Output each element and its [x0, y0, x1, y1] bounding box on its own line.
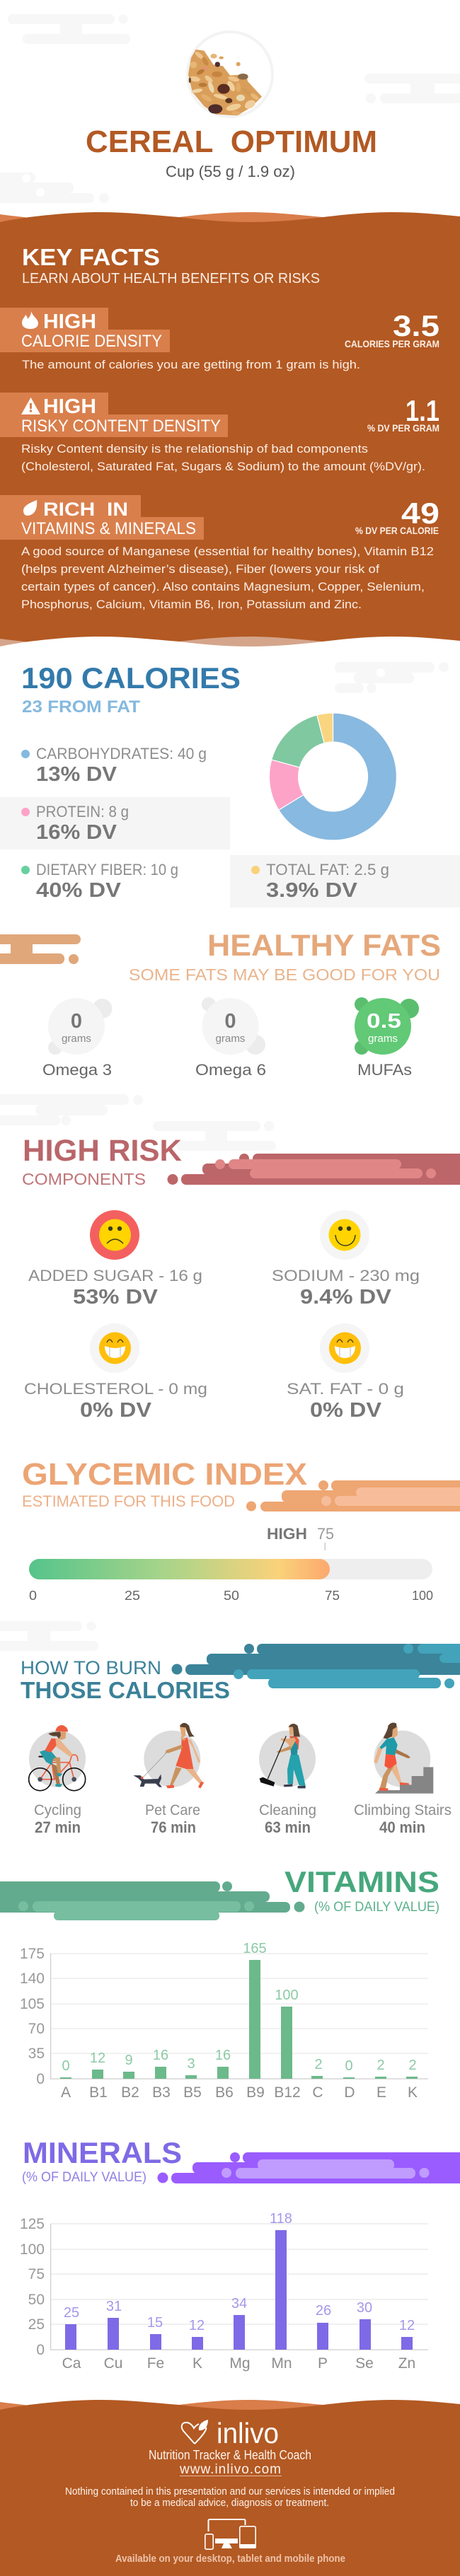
- stat: omega 3: 0: [71, 1010, 82, 1033]
- heading: VITAMINS: [284, 1865, 439, 1898]
- label: high: HIGH: [43, 395, 96, 418]
- subheading: ESTIMATED FOR THIS FOOD: [22, 1492, 235, 1510]
- legend: carbohydrates: 13% DV: [36, 763, 117, 786]
- decorative banner: vitamins: [0, 1881, 304, 1920]
- icon: devices: [205, 2519, 256, 2549]
- bar chart: vitamins: D: [344, 2084, 355, 2101]
- heading: HIGH RISK: [23, 1134, 182, 1168]
- legend: dietary fiber: DIETARY FIBER: 10 g: [36, 861, 178, 878]
- decorative banner: healthy fats: [0, 934, 81, 964]
- item: cholesterol: CHOLESTEROL - 0 mg: [24, 1380, 207, 1398]
- bar chart: minerals: 118: [270, 2211, 292, 2227]
- bar chart: minerals: 50: [28, 2292, 45, 2308]
- description: Phosphorus, Calcium, Vitamin B6, Iron, Potassium and Zinc.: [21, 598, 362, 611]
- bar chart: vitamins: 100: [275, 1988, 299, 2003]
- fact: risky content density: [0, 393, 439, 473]
- heading: calories: 190 CALORIES: [21, 661, 241, 695]
- bar chart: vitamins: 16: [153, 2048, 168, 2063]
- value: 3.5: 3.5: [393, 309, 439, 342]
- gauge scale: [29, 1589, 433, 1603]
- legend: carbohydrates: CARBOHYDRATES: 40 g: [36, 745, 207, 762]
- tagline: Nutrition Tracker & Health Coach: [149, 2448, 311, 2462]
- bar chart: minerals: Ca: [62, 2355, 81, 2372]
- bar chart: vitamins: B6: [215, 2084, 234, 2101]
- item: saturated fat: [287, 1323, 404, 1422]
- bar chart: vitamins: 175: [20, 1946, 45, 1962]
- bar chart: vitamins: 2: [314, 2057, 323, 2072]
- bar chart: vitamins: E: [376, 2084, 386, 2101]
- activity: climbing stairs: [354, 1723, 452, 1836]
- bar chart: vitamins: K: [408, 2084, 418, 2101]
- stat: omega 6: grams: [215, 1033, 245, 1045]
- bar chart: vitamins: B2: [121, 2084, 139, 2101]
- legend: total fat: [230, 855, 460, 907]
- description: certain types of cancer). Also contains Magnesium, Copper, Selenium,: [21, 580, 425, 593]
- unit: CALORIES PER GRAM: [345, 338, 439, 349]
- bar chart: minerals: 25: [64, 2305, 79, 2321]
- panel: high risk components: [0, 1094, 460, 1422]
- bar chart: minerals: Cu: [104, 2355, 122, 2372]
- item: saturated fat: SAT. FAT - 0 g: [287, 1380, 404, 1398]
- item: added sugar: ADDED SUGAR - 16 g: [28, 1267, 202, 1284]
- subheading: (% OF DAILY VALUE): [314, 1900, 439, 1915]
- panel: healthy fats: [0, 929, 441, 1079]
- description: (Cholesterol, Saturated Fat, Sugars & Sodium) to the amount (%DV/gr).: [21, 460, 425, 473]
- activity: climbing stairs: 40 min: [379, 1818, 425, 1836]
- item: added sugar: 53% DV: [73, 1286, 159, 1309]
- item: sodium: SODIUM - 230 mg: [272, 1267, 420, 1284]
- activity: climbing stairs: Climbing Stairs: [354, 1802, 452, 1818]
- bar chart: minerals: P: [318, 2355, 328, 2372]
- description: A good source of Manganese (essential for healthy bones), Vitamin B12: [21, 545, 434, 558]
- stat: omega 6: [195, 997, 266, 1079]
- bar chart: minerals: Zn: [398, 2355, 415, 2372]
- activity: cycling: 27 min: [35, 1818, 81, 1836]
- marker: high 75: 75: [317, 1525, 334, 1543]
- item: added sugar: [28, 1210, 202, 1309]
- gauge scale: 50: [224, 1589, 239, 1603]
- bar chart: vitamins: B12: [274, 2084, 301, 2101]
- heading line 2: THOSE CALORIES: [21, 1677, 230, 1703]
- bar chart: minerals: Se: [355, 2355, 374, 2372]
- bar chart: vitamins: A: [61, 2084, 71, 2101]
- bar chart: minerals: 100: [20, 2241, 45, 2258]
- bar chart: vitamins: 0: [62, 2058, 70, 2074]
- label: risky content density: RISKY CONTENT DENSITY: [21, 417, 221, 436]
- gauge scale: 0: [29, 1589, 37, 1603]
- availability note: Available on your desktop, tablet and mobile phone: [115, 2553, 345, 2565]
- bar chart: vitamins: 16: [215, 2048, 231, 2063]
- subheading: from fat: 23 FROM FAT: [22, 697, 140, 716]
- panel: how to burn those calories: [0, 1621, 460, 1836]
- bar chart: minerals: 25: [28, 2316, 45, 2333]
- activity: cycling: Cycling: [34, 1802, 81, 1818]
- description: [21, 442, 425, 473]
- bar chart: minerals: 31: [106, 2299, 122, 2314]
- heading: HEALTHY FATS: [207, 929, 441, 963]
- subheading: (% OF DAILY VALUE): [22, 2170, 146, 2185]
- legend: protein: 16% DV: [36, 821, 117, 844]
- bar chart: vitamins: B1: [89, 2084, 108, 2101]
- label: rich in: RICH IN: [43, 499, 128, 520]
- label: high: HIGH: [43, 311, 96, 333]
- stat: omega 3: [42, 998, 112, 1079]
- item: cholesterol: 0% DV: [80, 1399, 152, 1422]
- legend: carbohydrates: [21, 745, 207, 786]
- icon: leaf: [23, 500, 37, 516]
- legend: total fat: 3.9% DV: [266, 879, 358, 902]
- stat: mufas: [355, 997, 419, 1079]
- panel: glycemic index: [22, 1457, 460, 1603]
- description: (helps prevent Alzheimer’s disease), Fiber (lowers your risk of: [21, 562, 379, 576]
- bar chart: vitamins: 35: [28, 2046, 45, 2062]
- activity: cleaning: 63 min: [265, 1818, 311, 1836]
- bar chart: minerals: 0: [36, 2342, 45, 2358]
- logo text: inlivo: [217, 2417, 279, 2449]
- heading: key facts: KEY FACTS: [22, 244, 160, 270]
- bar chart: minerals: 34: [231, 2296, 247, 2311]
- activity: pet care: 76 min: [151, 1818, 196, 1836]
- bar chart: minerals: [20, 2211, 428, 2372]
- item: sodium: 9.4% DV: [300, 1286, 392, 1309]
- stat: omega 6: Omega 6: [195, 1061, 266, 1079]
- unit: % DV PER GRAM: [367, 422, 439, 434]
- value: 49: 49: [401, 497, 439, 530]
- legend: total fat: TOTAL FAT: 2.5 g: [266, 861, 389, 878]
- gauge bar: [29, 1559, 432, 1579]
- legend: protein: PROTEIN: 8 g: [36, 803, 129, 820]
- bar chart: vitamins: 0: [345, 2058, 353, 2074]
- activity: pet care: [133, 1723, 204, 1836]
- item: cholesterol: [24, 1323, 207, 1422]
- description: [21, 545, 434, 611]
- heading: MINERALS: [23, 2136, 182, 2169]
- stat: omega 6: 0: [224, 1010, 236, 1033]
- panel: key facts: [0, 212, 460, 665]
- bar chart: minerals: Mn: [271, 2355, 292, 2372]
- marker: high 75: [267, 1525, 334, 1550]
- bar chart: vitamins: 12: [90, 2050, 105, 2066]
- disclaimer: Nothing contained in this presentation and our services is intended or implied: [65, 2485, 395, 2497]
- subheading: SOME FATS MAY BE GOOD FOR YOU: [129, 965, 440, 984]
- legend: protein: [0, 797, 230, 849]
- subheading: COMPONENTS: [22, 1170, 146, 1188]
- gauge scale: 25: [125, 1589, 140, 1603]
- heading: GLYCEMIC INDEX: [22, 1457, 307, 1492]
- description: The amount of calories you are getting from 1 gram is high.: [22, 358, 360, 371]
- bar chart: vitamins: C: [312, 2084, 323, 2101]
- panel: minerals: [20, 2136, 460, 2372]
- panel: vitamins: [0, 1865, 439, 2101]
- bar chart: minerals: Fe: [147, 2355, 164, 2372]
- disclaimer: to be a medical advice, diagnosis or treatment.: [130, 2497, 329, 2509]
- subheading: LEARN ABOUT HEALTH BENEFITS OR RISKS: [22, 271, 320, 286]
- bar chart: vitamins: 140: [20, 1971, 45, 1987]
- decorative banner: minerals: [157, 2152, 460, 2183]
- bar chart: minerals: 12: [189, 2318, 205, 2333]
- legend: dietary fiber: [21, 861, 178, 902]
- label: vitamins and minerals: VITAMINS & MINERALS: [21, 519, 196, 538]
- icon: flame: [22, 311, 38, 329]
- bar chart: minerals: 15: [147, 2315, 163, 2331]
- bar chart: vitamins: 105: [20, 1996, 45, 2012]
- stat: mufas: grams: [368, 1033, 398, 1045]
- unit: % DV PER CALORIE: [355, 525, 439, 536]
- value: 1.1: 1.1: [406, 394, 439, 427]
- stat: mufas: MUFAs: [357, 1061, 412, 1079]
- logo: heart and leaf: [182, 2420, 208, 2444]
- marker: high 75: HIGH: [267, 1525, 307, 1543]
- label: calorie density: CALORIE DENSITY: [21, 332, 162, 351]
- bar chart: vitamins: 2: [408, 2058, 417, 2073]
- title: CEREAL OPTIMUM: [86, 124, 377, 159]
- fact: rich in vitamins and minerals: [0, 495, 439, 611]
- gauge scale: 75: [325, 1589, 340, 1603]
- bar chart: vitamins: 9: [125, 2053, 133, 2068]
- bar chart: vitamins: B3: [152, 2084, 171, 2101]
- bar chart: vitamins: B9: [246, 2084, 265, 2101]
- bar chart: minerals: 125: [20, 2216, 45, 2232]
- stat: omega 3: grams: [62, 1033, 91, 1045]
- donut chart: [269, 713, 396, 840]
- panel: footer: [0, 2400, 460, 2576]
- website: www.inlivo.com: [179, 2462, 281, 2477]
- decorative banner: high risk: [167, 1154, 460, 1185]
- icon: warning: [21, 398, 40, 414]
- bar chart: vitamins: 2: [376, 2058, 385, 2073]
- description: Risky Content density is the relationship of bad components: [21, 442, 368, 456]
- item: saturated fat: 0% DV: [310, 1399, 382, 1422]
- decorative banner: burn: [171, 1644, 460, 1688]
- serving size: Cup (55 g / 1.9 oz): [166, 163, 295, 180]
- activity: cleaning: Cleaning: [259, 1802, 316, 1818]
- stat: mufas: 0.5: [367, 1010, 401, 1033]
- header section: [0, 14, 460, 203]
- bar chart: vitamins: B5: [183, 2084, 202, 2101]
- item: sodium: [272, 1210, 420, 1309]
- bar chart: vitamins: 3: [187, 2056, 195, 2072]
- heading line 1: HOW TO BURN: [21, 1657, 161, 1678]
- bar chart: minerals: K: [192, 2355, 202, 2372]
- legend: dietary fiber: 40% DV: [36, 879, 122, 902]
- bar chart: vitamins: 70: [28, 2021, 45, 2037]
- stat: omega 3: Omega 3: [42, 1061, 112, 1079]
- activity: pet care: Pet Care: [145, 1802, 200, 1818]
- bar chart: minerals: 30: [357, 2300, 372, 2316]
- activity: cycling: [29, 1725, 86, 1836]
- bar chart: minerals: 75: [28, 2266, 45, 2282]
- panel: calories: [0, 661, 460, 907]
- bar chart: vitamins: [20, 1941, 428, 2101]
- food image: granola: [188, 32, 272, 117]
- bar chart: minerals: 26: [316, 2303, 331, 2319]
- activity: cleaning: [259, 1724, 316, 1836]
- disclaimer: [65, 2485, 395, 2509]
- bar chart: minerals: Mg: [229, 2355, 251, 2372]
- bar chart: vitamins: 0: [36, 2071, 45, 2087]
- decorative banner: glycemic: [246, 1480, 460, 1512]
- bar chart: vitamins: 165: [243, 1941, 267, 1956]
- fact: calorie density: [0, 308, 439, 371]
- gauge scale: 100: [412, 1589, 433, 1603]
- bar chart: minerals: 12: [399, 2318, 415, 2333]
